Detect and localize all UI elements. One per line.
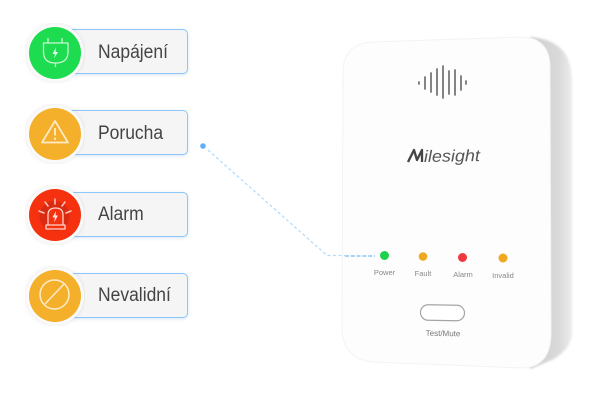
label text: Porucha: [98, 123, 163, 144]
item: Alarm: [25, 185, 190, 245]
icon: plug: [25, 23, 85, 83]
LED: Invalid: Invalid: [492, 271, 514, 280]
item: Nevalidní: [25, 266, 190, 326]
device front: [342, 37, 551, 368]
Milesight logo: ilesight: [424, 147, 482, 166]
LED: Power: [374, 251, 396, 277]
icon: warning triangle: [25, 104, 85, 164]
icon: prohibited sign: [25, 266, 85, 326]
LED: Alarm: Alarm: [453, 270, 473, 279]
Milesight logo: [408, 147, 482, 166]
Test/Mute button: [420, 305, 465, 338]
label text: Napájení: [98, 42, 168, 63]
icon: alarm beacon: [25, 185, 85, 245]
label box: [64, 273, 188, 318]
Test/Mute button: Test/Mute: [426, 329, 461, 338]
LED: Alarm: [453, 253, 473, 279]
item: Napájení: [25, 23, 190, 83]
LED: Fault: [415, 252, 432, 278]
LED: Power: Power: [374, 268, 396, 277]
LED: Invalid: [492, 254, 514, 280]
label text: Alarm: [98, 204, 144, 225]
speaker icon: [419, 66, 466, 98]
label text: Nevalidní: [98, 285, 171, 306]
device side: [530, 37, 572, 369]
label box: [64, 29, 188, 74]
label box: [64, 110, 188, 155]
item: Porucha: [25, 104, 190, 164]
label box: [64, 192, 188, 237]
LED: Fault: Fault: [415, 269, 432, 278]
